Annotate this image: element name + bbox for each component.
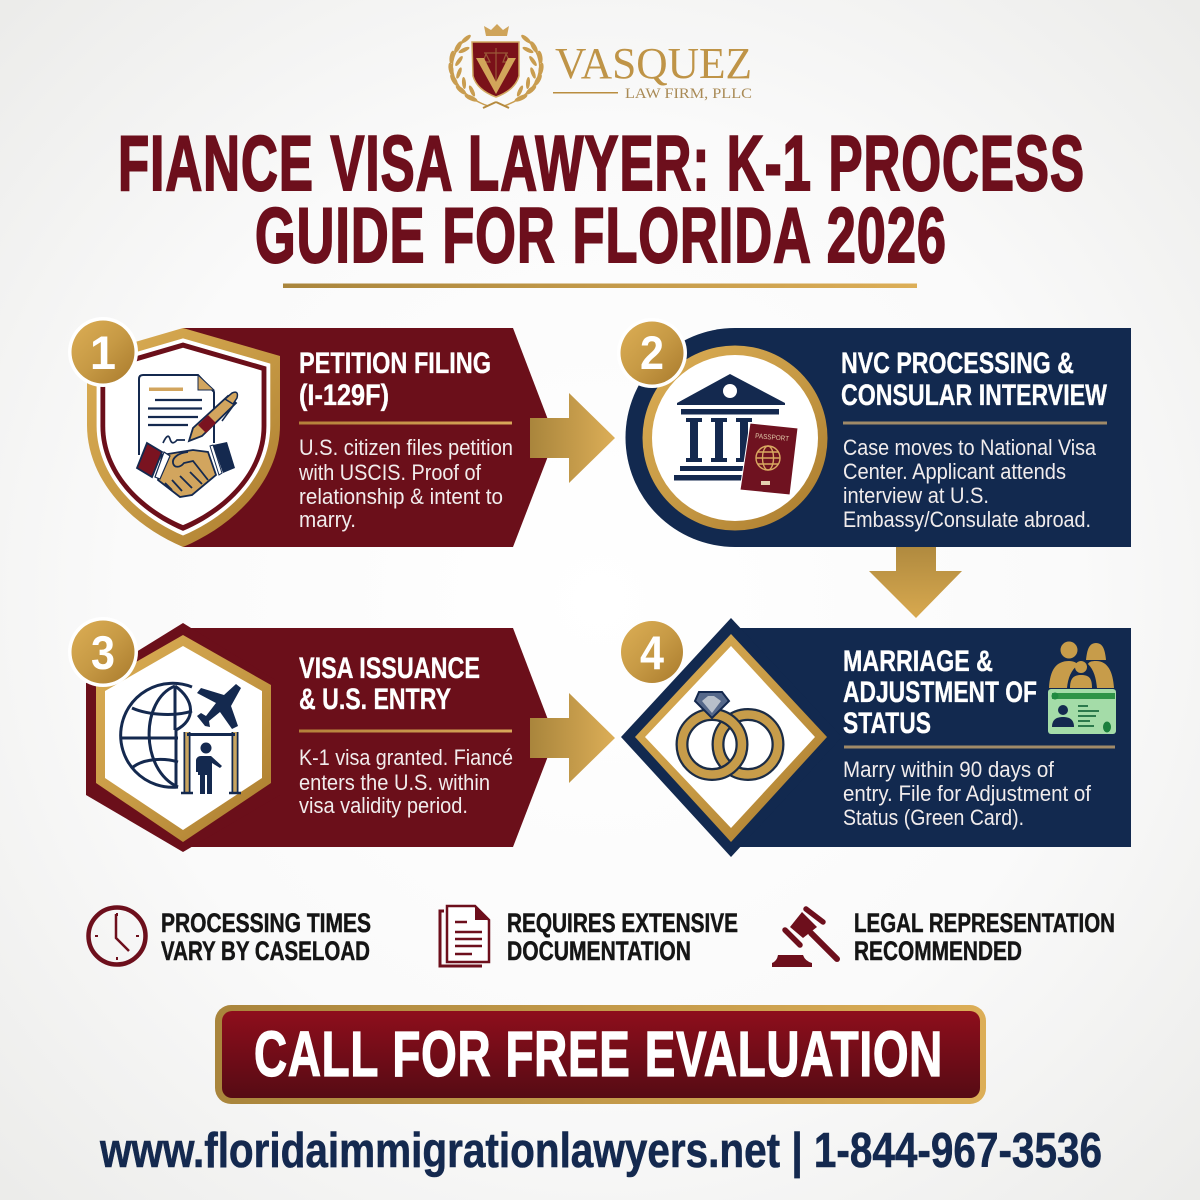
badge 3 [68,617,138,687]
note text 3 [854,908,1115,966]
description 3 [299,745,513,818]
hexagon emblem [86,623,280,852]
heading 2: CONSULAR INTERVIEW [841,379,1108,412]
arrow: step 1 to step 2 [530,393,615,483]
icon: family and green card [1048,642,1116,734]
heading 3: VISA ISSUANCE [299,652,480,685]
logo subtitle: LAW FIRM, PLLC [625,86,752,102]
description 3: visa validity period. [299,793,468,818]
badge 1 [68,317,138,387]
heading 1 [299,347,491,412]
note text 2: REQUIRES EXTENSIVE [507,908,738,938]
note: processing times [88,908,371,966]
logo: Vasquez Law Firm [448,24,752,108]
description 1: marry. [299,507,356,532]
icon: clock [88,908,146,964]
note text 3: RECOMMENDED [854,936,1022,966]
badge 4 [621,621,683,683]
shield emblem [87,328,280,547]
heading 4: MARRIAGE & [843,645,993,678]
note: legal representation [772,908,1115,967]
badge 3: 3 [91,626,115,679]
icon: courthouse and passport [674,374,798,495]
note text 3: LEGAL REPRESENTATION [854,908,1115,938]
description 4: entry. File for Adjustment of [843,781,1092,806]
description 4: Status (Green Card). [843,805,1024,830]
title [118,119,1085,279]
description 1: U.S. citizen files petition [299,435,513,460]
description 2 [843,435,1097,532]
icon: document stack [440,906,489,966]
icon: laurel wreath and crest [448,24,544,108]
description 1: with USCIS. Proof of [298,460,482,485]
description 3: K-1 visa granted. Fiancé [299,745,513,770]
note text 1: PROCESSING TIMES [161,908,371,938]
description 2: Embassy/Consulate abroad. [843,507,1091,532]
panel: step 3 visa issuance [68,617,555,852]
note text 2: DOCUMENTATION [507,936,691,966]
badge 4: 4 [640,626,664,679]
icon: gavel [772,909,837,967]
note text 1 [161,908,371,966]
badge 2: 2 [640,326,664,379]
heading 2: NVC PROCESSING & [841,347,1074,380]
heading 1: (I-129F) [299,379,389,412]
arrow: step 2 to step 4 [869,547,962,618]
description 2: interview at U.S. [843,483,989,508]
panel: step 4 marriage and adjustment [621,618,1131,857]
description 2: Center. Applicant attends [843,459,1066,484]
panel: step 2 NVC processing [617,318,1131,547]
heading 4 [843,645,1037,740]
call to action button [215,1005,986,1104]
description 1: relationship & intent to [299,484,503,509]
icon: courthouse and passport: PASSPORT [755,433,790,443]
note text 1: VARY BY CASELOAD [161,936,370,966]
badge 2 [617,318,687,388]
description 1 [298,435,513,532]
description 4 [843,757,1092,830]
description 2: Case moves to National Visa [843,435,1097,460]
heading 2 [841,347,1108,412]
diamond emblem [621,618,842,857]
icon: wedding rings [682,692,778,774]
description 4: Marry within 90 days of [843,757,1055,782]
call to action button: CALL FOR FREE EVALUATION [254,1018,943,1090]
badge 1: 1 [90,326,116,379]
note: documentation [440,906,738,966]
emblem ring [642,346,828,530]
heading 1: PETITION FILING [299,347,491,380]
icon: document, pen and handshake [137,375,237,497]
heading 3 [299,652,480,716]
icon: globe, plane and gate [121,683,241,794]
heading 3: & U.S. ENTRY [299,683,451,716]
heading 4: ADJUSTMENT OF [843,676,1037,709]
heading 4: STATUS [843,707,931,740]
panel: step 1 petition filing [68,317,555,547]
logo wordmark: VASQUEZ [555,39,752,88]
note text 2 [507,908,738,966]
description 3: enters the U.S. within [299,770,490,795]
arrow: step 3 to step 4 [530,693,615,783]
